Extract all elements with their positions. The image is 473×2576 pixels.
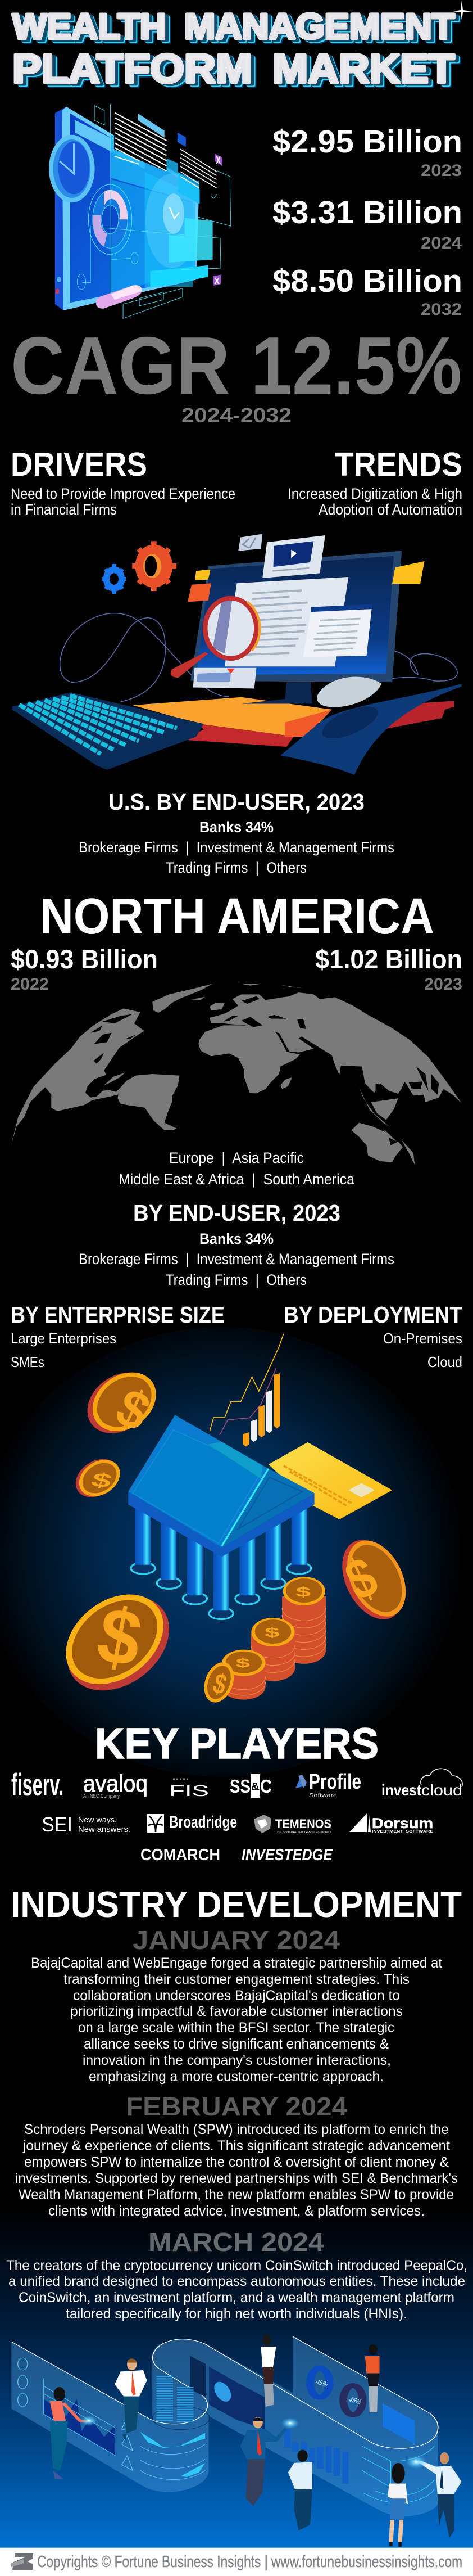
logo: FIS [169, 1779, 209, 1799]
value 2023: $2.95 Billion [272, 124, 462, 160]
continent: greenland [152, 984, 213, 1013]
market size values [272, 124, 462, 319]
island: madagascar [280, 1077, 292, 1089]
title: PLATFORM [16, 48, 256, 93]
development: January 2024: on a large scale within the BFSI sector. The strategic [78, 2020, 394, 2036]
development: January 2024 [31, 1925, 442, 2085]
by deployment [284, 1302, 462, 1370]
title: PLATFORM [17, 49, 257, 94]
person: man from behind [288, 2450, 312, 2530]
coin small left [68, 1451, 128, 1505]
by end-user: BY END-USER, 2023 [133, 1200, 340, 1226]
by end-user: Brokerage Firms | Investment & Management Firms [79, 1251, 394, 1267]
North America heading: NORTH AMERICA [40, 888, 434, 945]
development: January 2024: BajajCapital and WebEngage forged a strategic partnership aimed at [31, 1955, 442, 1971]
person: woman from behind [388, 2463, 408, 2547]
person: man in white shirt [115, 2358, 147, 2442]
continent: eurasia [210, 992, 462, 1103]
title: WEALTH [12, 6, 166, 47]
value 2023: 2023 [421, 161, 462, 180]
person: man with beard [418, 2452, 462, 2538]
development: February 2024: FEBRUARY 2024 [126, 2092, 347, 2121]
panel: drivers [11, 446, 235, 518]
development: March 2024 [6, 2227, 467, 2322]
title: MARKET [277, 49, 459, 94]
logo: Dorsum: Dorsum [372, 1816, 433, 1831]
illustration: people around data dashboards [11, 2335, 462, 2547]
bank roof [128, 1415, 315, 1557]
CAGR: 2024-2032 [181, 404, 292, 427]
coin small left: $ [89, 1468, 115, 1492]
development: March 2024: The creators of the cryptocurrency unicorn CoinSwitch introduced PeepalCo, [6, 2258, 467, 2273]
logo: investcloud [381, 1769, 462, 1799]
slider [193, 668, 256, 688]
U.S. by end-user [79, 789, 394, 876]
panel: trends: TRENDS [335, 446, 462, 483]
person: man in blue jacket [240, 2417, 286, 2506]
logo: SS&C: SS [230, 1776, 251, 1797]
coin stacks: $ [295, 1584, 311, 1600]
logo: Comarch: COMARCH [140, 1846, 220, 1864]
title: WEALTH [16, 8, 170, 48]
credit card [269, 1442, 392, 1519]
value 2024: 2024 [421, 234, 462, 252]
illustration: computer with magnifier [12, 534, 462, 775]
other regions [119, 1149, 355, 1188]
U.S. by end-user: Trading Firms | Others [166, 859, 307, 876]
panel: trends: Adoption of Automation [319, 501, 462, 518]
floating tags [195, 570, 211, 580]
islands: britain [210, 1003, 225, 1010]
development: January 2024: innovation in the company's customer interactions, [83, 2052, 391, 2068]
illustration: digital tablet dashboard [49, 104, 231, 318]
by end-user: Trading Firms | Others [166, 1271, 307, 1288]
dashboard ribbon [11, 2336, 438, 2516]
logo: avaloq: avaloq [83, 1770, 148, 1797]
chart panels: 45% [347, 2395, 363, 2406]
development: February 2024: Wealth Management Platform, the new platform enables SPW to provide [19, 2187, 454, 2203]
panel: drivers: DRIVERS [11, 446, 147, 483]
development: February 2024: investments. Supported by renewed partnerships with SEI & Benchmark's [15, 2171, 458, 2186]
mouse pad [280, 684, 462, 775]
icon: fortune business insights logo [11, 2553, 33, 2570]
gears [102, 564, 126, 594]
panel: drivers: Need to Provide Improved Experience [11, 485, 235, 502]
U.S. by end-user: Banks 34% [199, 819, 274, 836]
development: March 2024: a unified brand designed to encompass autonomous entities. These include [8, 2273, 465, 2289]
monitor stand [242, 682, 312, 704]
logo: SS&C: & [251, 1781, 260, 1793]
industry development heading: INDUSTRY DEVELOPMENT [11, 1884, 462, 1925]
coin top left [75, 1360, 169, 1446]
world map globe [11, 984, 462, 1165]
logo: SS&C [230, 1774, 272, 1798]
continent: south america [117, 1074, 180, 1130]
by enterprise size: Large Enterprises [11, 1330, 116, 1347]
title: MANAGEMENT [184, 6, 454, 47]
North America values: 2022 [11, 975, 49, 994]
coin large left: $ [91, 1591, 148, 1684]
title: MARKET [276, 48, 458, 93]
panel: trends [288, 446, 462, 518]
keyboard [12, 692, 203, 770]
title: WEALTH [18, 10, 172, 51]
coin right [330, 1531, 417, 1628]
panel: drivers: in Financial Firms [11, 501, 117, 518]
chart panels: 45% [313, 2378, 330, 2388]
development: February 2024: journey & experience of clients. This significant strategic advancement [22, 2138, 450, 2154]
monitor [190, 551, 402, 682]
columns [131, 1506, 311, 1619]
logo: avaloq: An NEC Company [83, 1793, 120, 1799]
person: woman in orange top [365, 2344, 380, 2412]
coin stacks [199, 1577, 326, 1706]
development: February 2024: Schroders Personal Wealth (SPW) introduced its platform to enrich the [24, 2122, 449, 2137]
value 2032 [272, 263, 462, 319]
logo: Broadridge: Broadridge [169, 1813, 237, 1831]
title: PLATFORM [18, 51, 258, 96]
logo: Investedge: INVESTEDGE [242, 1846, 333, 1864]
development: January 2024: JANUARY 2024 [133, 1925, 340, 1955]
development: March 2024: CoinSwitch, an investment platform, and a wealth management platform [19, 2290, 454, 2306]
logo: Profile: Profile [309, 1770, 361, 1794]
title: MARKET [278, 51, 460, 96]
North America values: $0.93 Billion [11, 944, 158, 974]
U.S. by end-user: Brokerage Firms | Investment & Management Firms [79, 839, 394, 856]
logo: FIS: FIS [169, 1782, 209, 1799]
logo: SEI: New ways. [78, 1815, 117, 1825]
coin stacks: $ [210, 1667, 230, 1701]
development: February 2024: empowers SPW to internalize the control & oversight of client money & [24, 2154, 449, 2170]
chart panels [18, 2356, 434, 2503]
key player logos [11, 1767, 462, 1864]
by enterprise size: BY ENTERPRISE SIZE [11, 1302, 225, 1328]
coin stacks: $ [236, 1656, 250, 1670]
development: February 2024 [15, 2092, 458, 2219]
illustration: bank with coins [47, 1334, 417, 1709]
by enterprise size: SMEs [11, 1354, 44, 1370]
title: MARKET [272, 47, 454, 92]
title: MANAGEMENT [188, 8, 458, 48]
cables [60, 613, 457, 702]
coin top left: $ [107, 1377, 159, 1442]
value 2024: $3.31 Billion [272, 195, 462, 231]
by end-user: Banks 34% [199, 1230, 274, 1247]
coin large left [47, 1576, 189, 1709]
value 2032: 2032 [421, 300, 462, 319]
by end-user [79, 1200, 394, 1288]
bottom gradient background [0, 2210, 473, 2547]
development: January 2024: transforming their customer engagement strategies. This [63, 1972, 410, 1987]
other regions: Middle East & Africa | South America [119, 1171, 355, 1188]
continent: africa [198, 1025, 300, 1093]
development: January 2024: emphasizing a more customer-centric approach. [89, 2069, 384, 2085]
logo: Broadridge [147, 1813, 237, 1833]
logo: Temenos: THE BANKING SOFTWARE COMPANY [275, 1830, 331, 1833]
title [12, 0, 473, 96]
development: January 2024: collaboration underscores BajajCapital's dedication to [73, 1988, 400, 2004]
North America values [11, 944, 462, 994]
logo: fiserv: fiserv. [11, 1767, 63, 1802]
value 2032: $8.50 Billion [272, 263, 462, 299]
logo: Temenos [254, 1815, 331, 1833]
by deployment: On-Premises [383, 1330, 462, 1347]
logo: Dorsum: INVESTMENT SOFTWARE [372, 1830, 433, 1834]
person: woman in white coat [261, 2335, 276, 2407]
document windows [225, 577, 348, 666]
logo: SS&C: C [260, 1776, 272, 1797]
islands: southeast asia [359, 1087, 415, 1165]
mouse [317, 677, 381, 707]
logo: Profile [295, 1770, 361, 1799]
development: January 2024: prioritizing impactful & favorable customer interactions [70, 2004, 403, 2019]
glow points [80, 2416, 427, 2469]
logo: Profile: Software [309, 1793, 338, 1799]
value 2023 [272, 124, 462, 180]
title: WEALTH [17, 9, 171, 49]
title: MANAGEMENT [189, 9, 459, 49]
desk [133, 697, 332, 736]
coin right: $ [336, 1544, 386, 1613]
title: PLATFORM [12, 47, 252, 92]
continent: australia [352, 1123, 403, 1162]
footer [0, 2547, 473, 2576]
title: MANAGEMENT [190, 10, 460, 51]
growth chart [210, 1334, 284, 1446]
bank illustration background glow [0, 1327, 463, 1777]
development: March 2024: MARCH 2024 [148, 2227, 324, 2257]
logo: SEI: New answers. [78, 1825, 130, 1834]
key players heading: KEY PLAYERS [95, 1720, 379, 1768]
other regions: Europe | Asia Pacific [169, 1149, 304, 1166]
logo: Temenos: TEMENOS [275, 1817, 331, 1831]
North America values: $1.02 Billion [315, 944, 462, 974]
development: January 2024: alliance seeks to drive significant enhancements & [84, 2036, 389, 2052]
person: woman in coral top [50, 2387, 88, 2479]
video box [262, 535, 325, 578]
logo: investcloud: invest [381, 1781, 421, 1799]
by enterprise size [11, 1302, 225, 1370]
development: February 2024: clients with integrated advice, investment, & platform services. [48, 2203, 425, 2219]
continent: north america [11, 1008, 144, 1146]
logo: Dorsum [349, 1813, 433, 1834]
development: March 2024: tailored specifically for high net worth individuals (HNIs). [66, 2306, 407, 2322]
by deployment: Cloud [427, 1354, 462, 1370]
magnifier [171, 652, 208, 678]
U.S. by end-user: U.S. BY END-USER, 2023 [108, 789, 365, 815]
logo: SEI [42, 1813, 130, 1836]
logo: investcloud: cloud [421, 1781, 462, 1799]
logo: SEI: SEI [42, 1813, 72, 1836]
coin stacks: $ [265, 1625, 280, 1640]
value 2024 [272, 195, 462, 252]
North America values: 2023 [424, 975, 462, 994]
